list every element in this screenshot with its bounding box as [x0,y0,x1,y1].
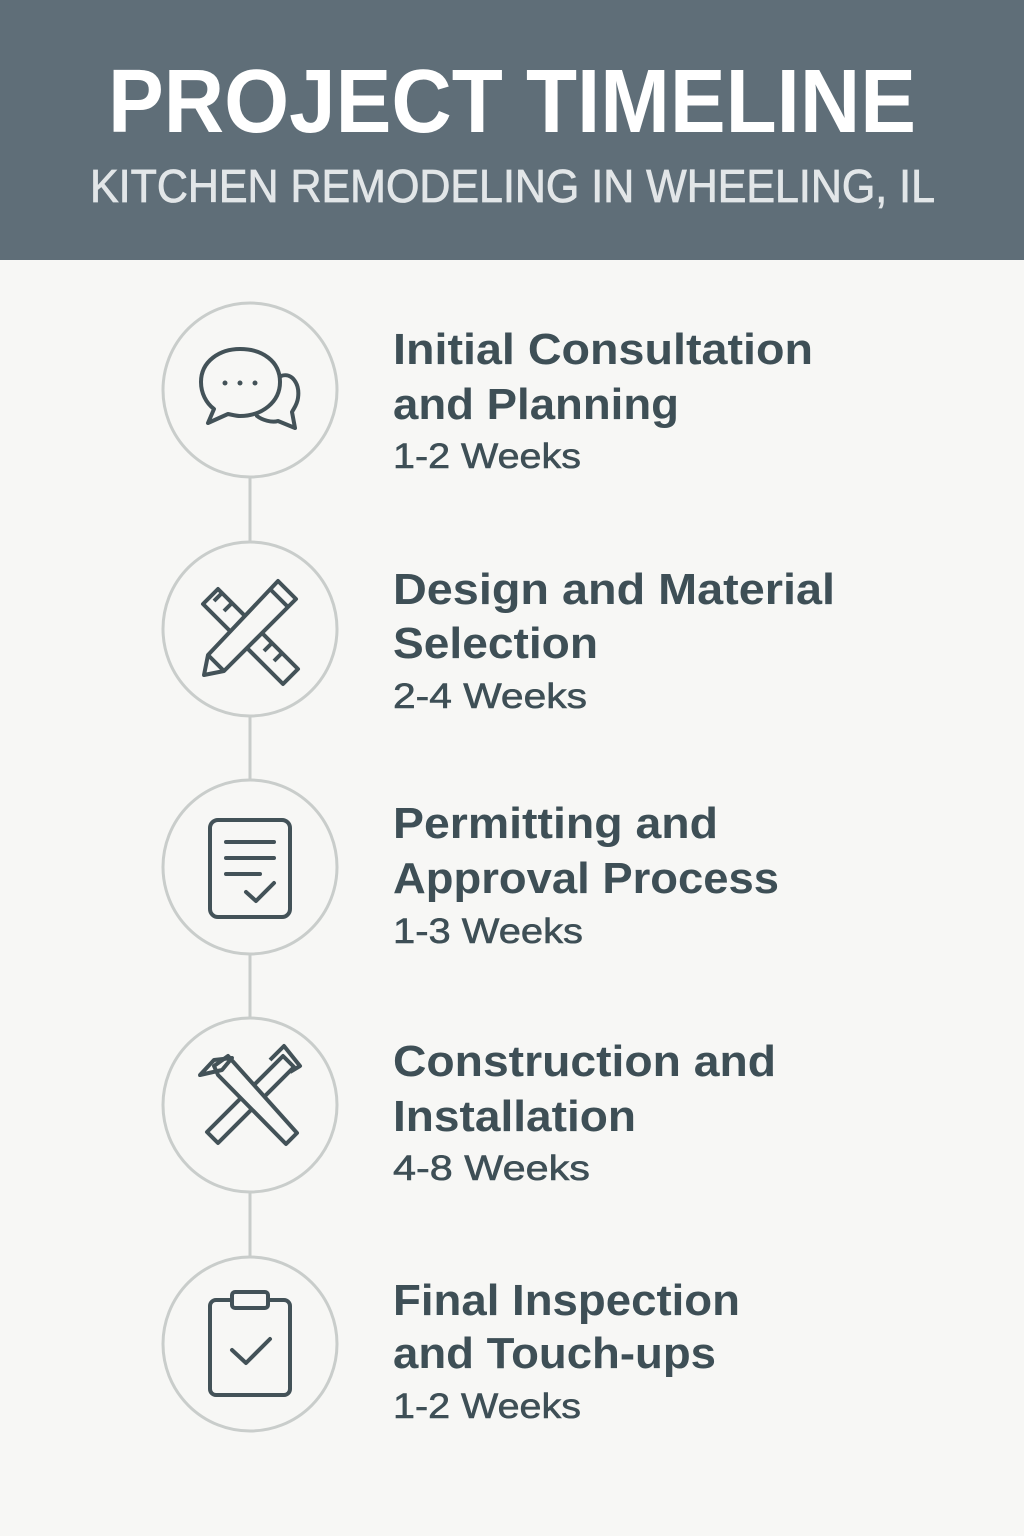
header [0,0,1024,260]
text: step 2: 2-4 Weeks [393,677,587,716]
text: step 4: Installation [393,1092,636,1141]
step 4: construction [163,1018,776,1192]
text: step 3: 1-3 Weeks [393,912,583,951]
text: step 5: Final Inspection [393,1276,740,1325]
text: step 1: and Planning [393,380,679,429]
text: step 3: Approval Process [393,854,779,903]
icon: clipboard check [210,1292,290,1395]
step 5: final inspection [163,1257,740,1431]
text: step 3 [393,799,779,951]
text: step 2 [393,565,835,716]
icon: chat bubbles [201,349,298,428]
text: step 2: Selection [393,619,598,668]
subtitle: KITCHEN REMODELING IN WHEELING, IL [90,160,935,212]
text: step 2: Design and Material [393,565,835,614]
text: step 4: Construction and [393,1037,776,1086]
text: step 3: Permitting and [393,799,718,848]
text: step 4: 4-8 Weeks [393,1149,590,1188]
text: step 1: Initial Consultation [393,325,813,374]
step 2: design [163,542,835,716]
timeline connectors [248,477,252,1257]
title: PROJECT TIMELINE [108,52,916,152]
icon: hammer and wrench [200,1046,300,1144]
text: step 5: 1-2 Weeks [393,1387,581,1426]
icon: ruler and pencil [203,581,298,684]
text: step 1 [393,325,813,476]
step 1: consultation [163,303,813,477]
text: step 4 [393,1037,776,1188]
text: step 5: and Touch-ups [393,1329,716,1378]
text: step 5 [393,1276,740,1426]
text: step 1: 1-2 Weeks [393,437,581,476]
icon: document with check [210,820,290,917]
step 3: permitting [163,780,779,954]
